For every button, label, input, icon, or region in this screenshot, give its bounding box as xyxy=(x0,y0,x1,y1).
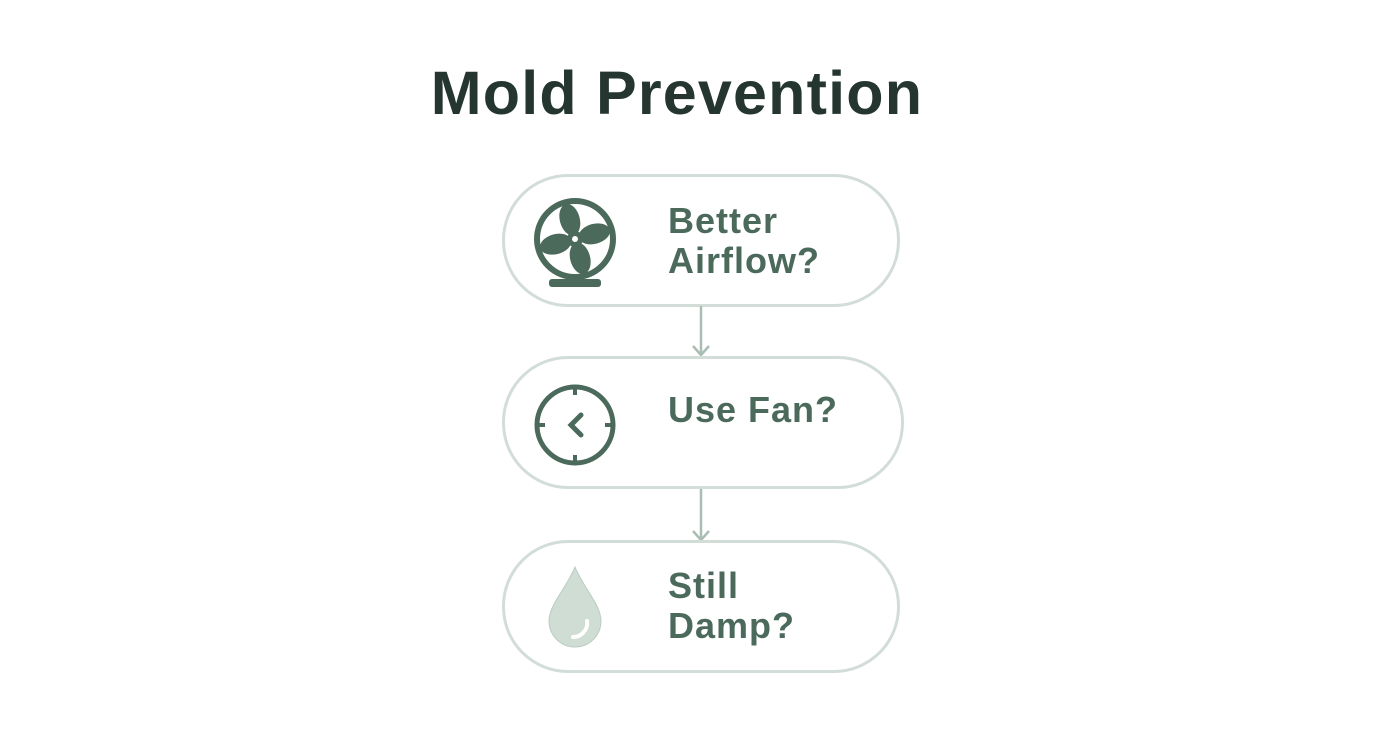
icon: clock xyxy=(534,384,616,466)
text: better airflow: Better xyxy=(668,200,778,241)
icon: water drop xyxy=(548,566,602,648)
text: still damp: Damp? xyxy=(668,605,795,646)
arrow 2 xyxy=(692,489,710,540)
text: still damp: Still xyxy=(668,565,739,606)
panel: better airflow xyxy=(502,174,900,307)
text: better airflow xyxy=(668,200,820,281)
panel: still damp xyxy=(502,540,900,673)
title: Mold Prevention xyxy=(431,59,923,127)
icon: fan xyxy=(534,198,616,287)
text: use fan: Use Fan? xyxy=(668,389,838,430)
text: better airflow: Airflow? xyxy=(668,240,820,281)
text: still damp xyxy=(668,565,795,646)
arrow 1 xyxy=(692,306,710,356)
panel: use fan xyxy=(502,356,904,489)
